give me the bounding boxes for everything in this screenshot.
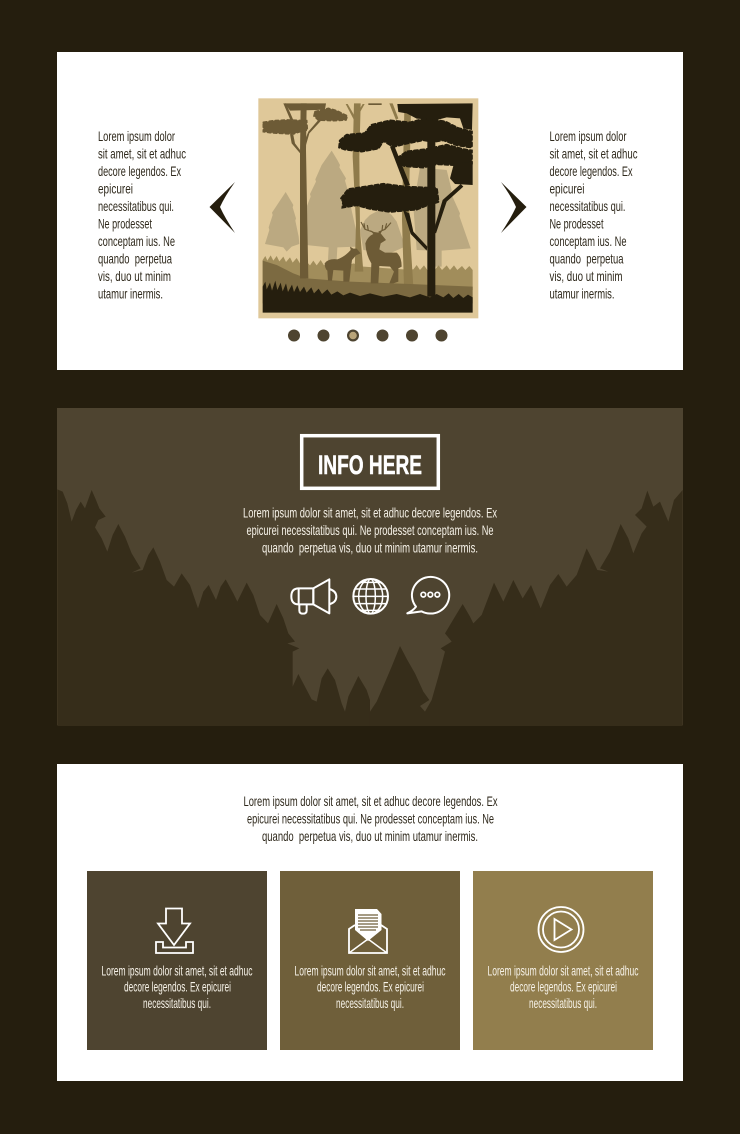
text block: intro: Lorem ipsum dolor sit amet, sit et adhuc decore legendos. Ex bbox=[243, 504, 497, 520]
text block: features intro: Lorem ipsum dolor sit amet, sit et adhuc decore legendos. Ex bbox=[244, 793, 498, 809]
text block: left column: conceptam ius. Ne bbox=[98, 233, 175, 249]
pagination dots bbox=[288, 330, 448, 342]
card text: Lorem ipsum dolor sit amet, sit et adhuc bbox=[102, 962, 252, 978]
text block: right column: Ne prodesset bbox=[550, 216, 604, 232]
text block: left column: decore legendos. Ex bbox=[98, 163, 181, 179]
text block: left column: quando perpetua bbox=[98, 250, 172, 266]
card text: necessitatibus qui. bbox=[529, 995, 597, 1011]
card: email bbox=[280, 871, 460, 1050]
heading: info here bbox=[302, 436, 438, 488]
mid trunks bbox=[346, 103, 413, 287]
text block: left column: Lorem ipsum dolor bbox=[98, 128, 175, 144]
text block: left column: epicurei bbox=[98, 180, 133, 196]
card text bbox=[294, 962, 446, 1011]
card text: decore legendos. Ex epicurei bbox=[510, 978, 617, 994]
text block: features intro: epicurei necessitatibus qui. Ne prodesset conceptam ius. Ne bbox=[247, 810, 494, 826]
text block: left column bbox=[98, 128, 186, 302]
card text: necessitatibus qui. bbox=[143, 995, 211, 1011]
text block: left column: sit amet, sit et adhuc bbox=[98, 146, 186, 162]
text block: right column: quando perpetua bbox=[550, 250, 624, 266]
forest silhouette: right bbox=[370, 490, 683, 726]
panel: image slider bbox=[57, 52, 683, 370]
text block: right column: conceptam ius. Ne bbox=[550, 233, 627, 249]
text block: right column bbox=[550, 128, 638, 302]
card text: Lorem ipsum dolor sit amet, sit et adhuc bbox=[294, 962, 446, 978]
text block: right column: Lorem ipsum dolor bbox=[550, 128, 627, 144]
text block: left column: necessitatibus qui. bbox=[98, 198, 174, 214]
text block: right column: decore legendos. Ex bbox=[550, 163, 632, 179]
text block: left column: utamur inermis. bbox=[98, 286, 163, 302]
icon: download bbox=[156, 908, 193, 953]
icon: speech bubble bbox=[407, 577, 449, 614]
arrow: previous bbox=[210, 182, 235, 233]
card text: decore legendos. Ex epicurei bbox=[317, 978, 424, 994]
text block: right column: sit amet, sit et adhuc bbox=[550, 146, 638, 162]
deer: doe bbox=[325, 247, 361, 282]
card: video bbox=[473, 871, 653, 1050]
card text bbox=[102, 962, 252, 1011]
text block: right column: necessitatibus qui. bbox=[550, 198, 626, 214]
card text: decore legendos. Ex epicurei bbox=[124, 978, 231, 994]
card text: necessitatibus qui. bbox=[336, 995, 404, 1011]
card: download bbox=[87, 871, 267, 1050]
text block: left column: Ne prodesset bbox=[98, 216, 152, 232]
icon: megaphone bbox=[291, 579, 336, 614]
foreground tree bbox=[263, 103, 473, 313]
background pine trees bbox=[265, 151, 471, 267]
text block: features intro bbox=[244, 793, 498, 844]
text block: features intro: quando perpetua vis, duo ut minim utamur inermis. bbox=[262, 828, 478, 844]
text block: intro: epicurei necessitatibus qui. Ne prodesset conceptam ius. Ne bbox=[246, 522, 494, 538]
heading: info here: INFO HERE bbox=[318, 450, 422, 480]
text block: right column: epicurei bbox=[550, 180, 584, 196]
text block: intro bbox=[243, 504, 497, 556]
text block: right column: utamur inermis. bbox=[550, 286, 614, 302]
hill bbox=[263, 261, 473, 303]
illustration: forest with deer bbox=[258, 98, 478, 318]
card text: Lorem ipsum dolor sit amet, sit et adhuc bbox=[488, 962, 638, 978]
panel: features bbox=[57, 764, 683, 1081]
arrow: next bbox=[501, 182, 526, 233]
icon: play bbox=[538, 907, 584, 952]
icon: envelope bbox=[349, 909, 387, 953]
forest silhouette: left bbox=[57, 489, 370, 726]
card text bbox=[488, 962, 638, 1011]
left tree bbox=[263, 103, 402, 283]
foreground grass bbox=[263, 281, 473, 313]
text block: intro: quando perpetua vis, duo ut minim utamur inermis. bbox=[262, 540, 478, 556]
deer: stag bbox=[365, 230, 402, 283]
text block: right column: vis, duo ut minim bbox=[550, 268, 622, 284]
mid grass band bbox=[263, 255, 473, 290]
panel: info here bbox=[57, 408, 683, 726]
icon: globe bbox=[353, 579, 388, 614]
text block: left column: vis, duo ut minim bbox=[98, 268, 171, 284]
